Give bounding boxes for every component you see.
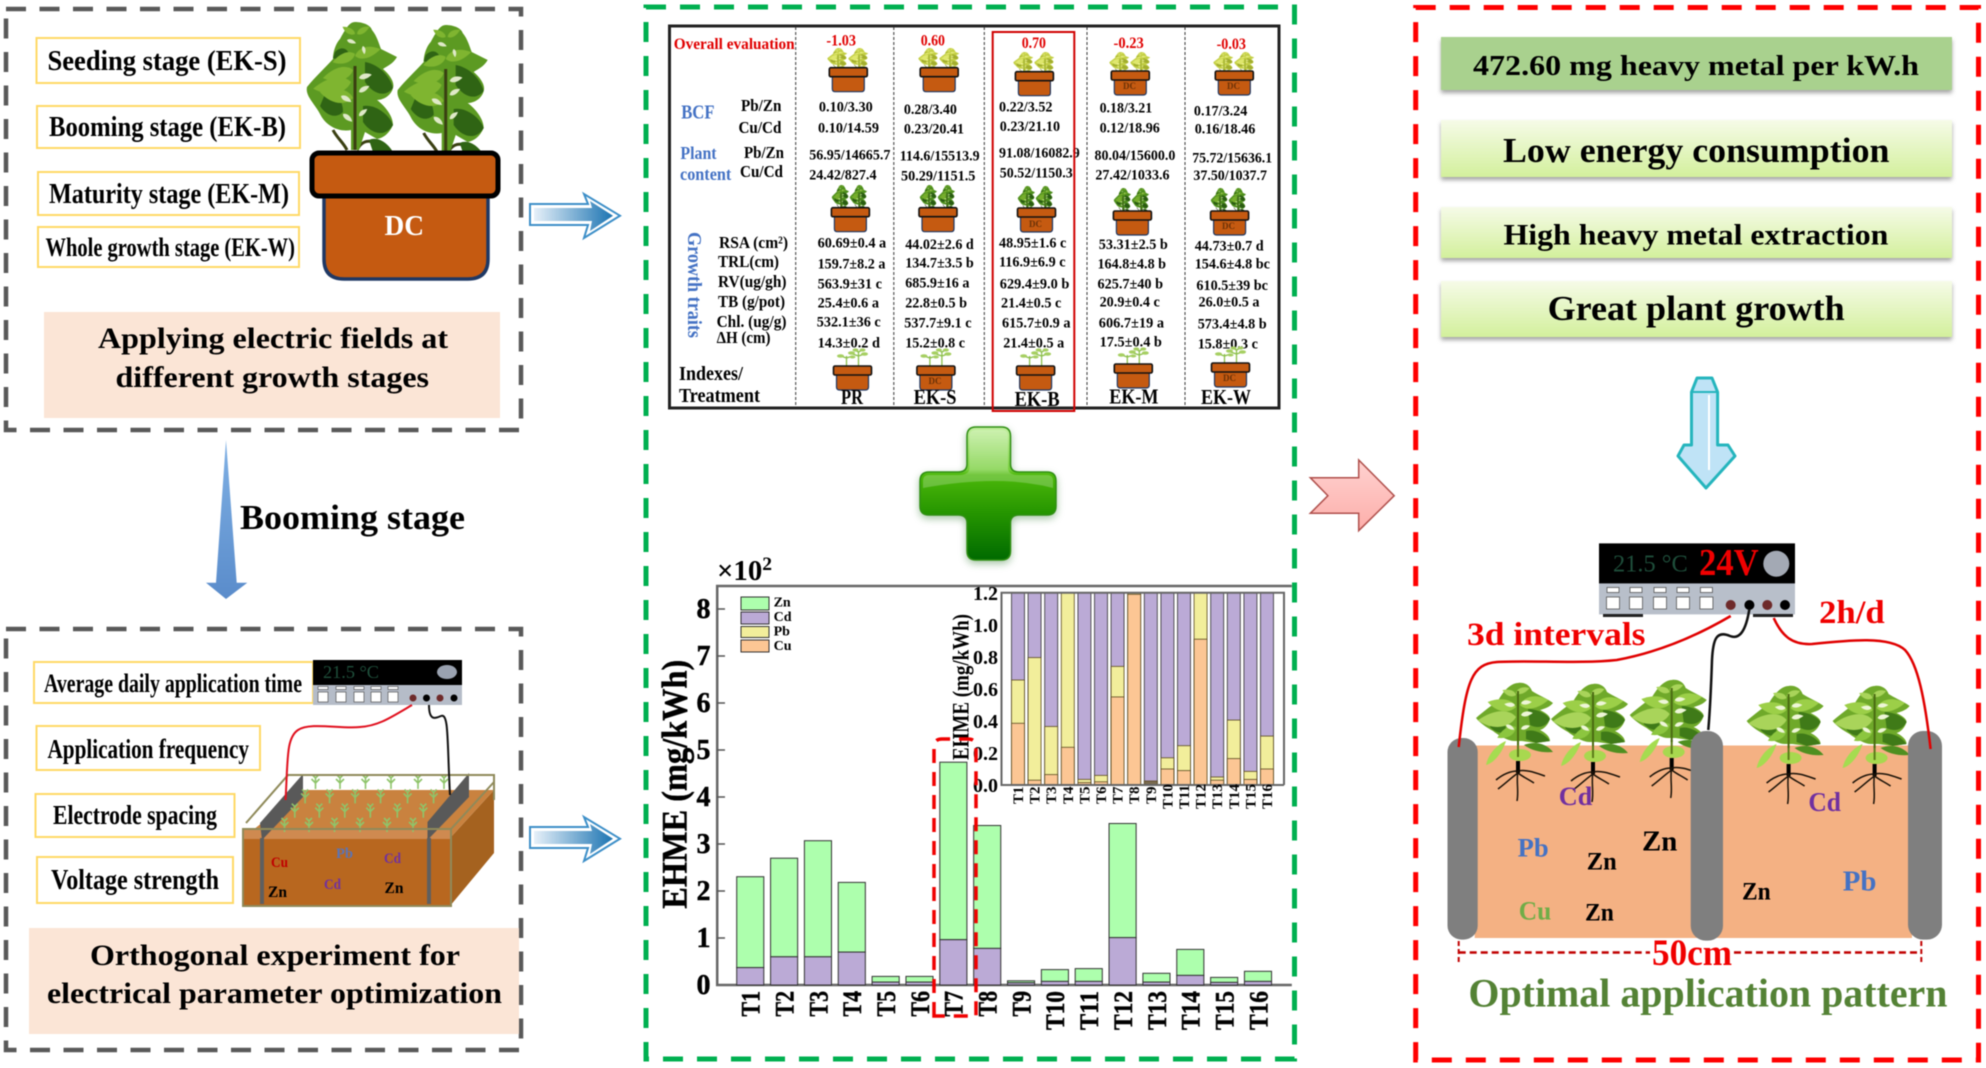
- row labels: BCF and plant content: Pb/Zn: [744, 143, 784, 162]
- values: column EK-M upper: 0.12/18.96: [1100, 121, 1160, 137]
- values: column EK-B growth: 116.9±6.9 c: [999, 255, 1066, 271]
- overall evaluation scores: -0.03: [1217, 36, 1246, 53]
- label: maturity stage: Maturity stage (EK-M): [49, 179, 289, 210]
- highlight: T7 dashed box: [934, 739, 976, 1016]
- label: application frequency: Application frequency: [48, 734, 249, 764]
- label: average daily application time: [34, 662, 313, 703]
- values: column EK-W growth: 15.8±0.3 c: [1198, 336, 1258, 352]
- values: column EK-W growth: 44.73±0.7 d: [1195, 239, 1264, 255]
- axis labels: treatments: Treatment: [679, 386, 760, 407]
- arrow: cyan down: [1678, 378, 1735, 488]
- overall evaluation scores: 0.60: [921, 33, 945, 50]
- panel: orthogonal experiment: [6, 629, 521, 1050]
- x axis labels: T4: [838, 991, 867, 1016]
- icon: power supply 24V: 21.5 °C: [1613, 552, 1688, 578]
- values: column EK-M upper: [1094, 101, 1175, 183]
- inset x labels: T15: [1243, 784, 1259, 809]
- icon: plants in DC pot: DC: [384, 211, 424, 242]
- heavy metal labels: Zn: [1742, 878, 1771, 905]
- values: column EK-S upper: [900, 102, 980, 184]
- y axis ticks: 1: [696, 923, 710, 954]
- row labels: BCF and plant content: BCF: [681, 101, 714, 123]
- values: column EK-W growth: 154.6±4.8 bc: [1195, 256, 1271, 272]
- inset x labels: T1: [1011, 786, 1027, 804]
- label: whole growth stage: [38, 227, 299, 267]
- label: application frequency: [36, 726, 260, 770]
- axis labels: treatments: PR: [841, 385, 864, 409]
- x axis labels: T1: [736, 991, 766, 1016]
- dimension: 50cm: [1459, 933, 1921, 974]
- values: column EK-W upper: 75.72/15636.1: [1192, 151, 1272, 167]
- values: column PR upper: 0.10/3.30: [819, 100, 873, 116]
- icon: mature pot PR: [827, 48, 868, 92]
- overall evaluation scores: [826, 33, 1246, 53]
- icon: power supply 24V: 24V: [1699, 542, 1759, 584]
- heavy metal labels: [1518, 782, 1876, 926]
- icon: seedling pot EK-W: DC: [1223, 373, 1236, 383]
- label: maturity stage: [38, 172, 299, 215]
- text: booming stage: Booming stage: [240, 498, 465, 537]
- values: column PR growth: 14.3±0.2 d: [818, 335, 880, 351]
- legend: Cu: [774, 639, 792, 654]
- multiplier: 2: [762, 554, 772, 575]
- values: column EK-S growth: [904, 237, 974, 351]
- wires: red and black leads: [286, 705, 450, 800]
- diagram: optimal application pattern: [1448, 542, 1948, 1016]
- legend: Cd: [774, 610, 792, 625]
- values: column EK-W upper: 0.16/18.46: [1195, 121, 1255, 137]
- x axis labels: T8: [974, 991, 1002, 1016]
- icon: mature pot EK-S: [918, 48, 959, 92]
- icon: soil box with electrodes: Pb: [336, 846, 353, 862]
- values: column EK-B upper: 50.52/1150.3: [1000, 166, 1073, 182]
- y axis ticks: 2: [696, 876, 710, 907]
- label: whole growth stage: Whole growth stage (EK-W): [46, 233, 295, 262]
- soil block: [1475, 746, 1912, 938]
- values: column EK-M upper: 27.42/1033.6: [1095, 167, 1170, 183]
- inset x labels: T12: [1194, 784, 1210, 809]
- icon: mature pot EK-M: DC: [1123, 81, 1136, 91]
- panel: growth stages: [6, 9, 521, 430]
- values: column PR upper: 24.42/827.4: [809, 167, 876, 183]
- caption: applying electric fields: different growth stages: [116, 361, 429, 394]
- inset x labels: T8: [1127, 786, 1143, 804]
- row labels: growth indexes: TRL(cm): [718, 252, 779, 271]
- values: column EK-W upper: 0.17/3.24: [1194, 103, 1247, 119]
- values: column EK-B upper: 0.23/21.10: [1000, 119, 1060, 135]
- icon: mature pot EK-M: [1109, 52, 1150, 95]
- heavy metal labels: Zn: [1587, 849, 1617, 876]
- row labels: growth indexes: [717, 233, 788, 347]
- row label: growth traits: Growth traits: [683, 232, 705, 338]
- label: 3d intervals: 3d intervals: [1467, 617, 1646, 653]
- inset y ticks: 1.2: [973, 583, 998, 605]
- icon: seedling pot EK-M: [1114, 347, 1152, 388]
- bars: Zn and Cd: [737, 762, 1272, 985]
- inset y title: EHME (mg/kWh): [948, 614, 974, 760]
- icon: booming pot EK-B: [1018, 186, 1056, 232]
- inset y ticks: 0.4: [973, 711, 998, 733]
- label: electrode spacing: [36, 794, 234, 837]
- values: column EK-M growth: 625.7±40 b: [1098, 276, 1163, 292]
- values: column EK-M upper: 0.18/3.21: [1100, 101, 1152, 117]
- icon: green plus: [920, 427, 1056, 560]
- result: energy efficiency: 472.60 mg heavy metal per kW.h: [1473, 50, 1919, 82]
- y axis ticks: 5: [696, 735, 710, 766]
- inset x labels: T16: [1260, 783, 1276, 809]
- arrow: pink right: [1310, 460, 1394, 531]
- panel: evaluation and chart: [646, 7, 1294, 1059]
- heavy metal labels: Cd: [1559, 782, 1593, 811]
- row label: overall evaluation: Overall evaluation: [674, 36, 795, 53]
- wires: [1459, 609, 1931, 749]
- inset y ticks: [973, 583, 998, 797]
- label: average daily application time: Average daily application time: [44, 669, 302, 698]
- values: column EK-M growth: 164.8±4.8 b: [1098, 256, 1166, 272]
- x axis labels: T5: [872, 991, 901, 1016]
- row labels: growth indexes: RV(ug/gh): [718, 272, 786, 291]
- row labels: BCF and plant content: [680, 96, 784, 184]
- row labels: BCF and plant content: Cu/Cd: [740, 162, 783, 181]
- icon: booming pot EK-M: [1113, 188, 1151, 235]
- values: column EK-W growth: 26.0±0.5 a: [1198, 295, 1260, 311]
- caption: orthogonal experiment: electrical parameter optimization: [47, 977, 502, 1010]
- icon: seedling pot EK-S: [917, 348, 955, 390]
- x axis labels: T14: [1177, 991, 1206, 1030]
- icon: soil box with electrodes: [243, 773, 494, 906]
- multiplier: ×10: [717, 556, 761, 587]
- inset x labels: T2: [1028, 786, 1044, 804]
- values: column EK-S growth: 134.7±3.5 b: [905, 255, 974, 271]
- values: column EK-B growth: 629.4±9.0 b: [1000, 276, 1069, 292]
- result: great plant growth: Great plant growth: [1548, 289, 1845, 328]
- inset bars: [1012, 593, 1274, 785]
- heavy metal labels: Cd: [1808, 787, 1841, 817]
- panel: optimal outcome: [1416, 8, 1978, 1060]
- label: electrode spacing: Electrode spacing: [53, 800, 217, 830]
- row labels: growth indexes: ΔH (cm): [717, 328, 770, 347]
- overall evaluation scores: -1.03: [826, 33, 856, 50]
- inset y ticks: 0.6: [973, 679, 998, 701]
- icon: soil box with electrodes: Zn: [268, 884, 287, 901]
- axis labels: treatments: EK-B: [1015, 387, 1060, 411]
- result: great plant growth: [1441, 281, 1952, 337]
- x axis labels: T16: [1244, 991, 1273, 1030]
- values: column EK-M upper: 80.04/15600.0: [1094, 148, 1175, 164]
- values: column EK-S growth: 537.7±9.1 c: [904, 315, 972, 331]
- x axis labels: T9: [1007, 991, 1036, 1016]
- plot frame: [717, 586, 1292, 985]
- heavy metal labels: Pb: [1518, 834, 1549, 863]
- icon: power supply: 21.5 °C: [323, 662, 379, 682]
- values: column EK-S upper: 0.28/3.40: [904, 102, 957, 118]
- icon: seedling pot EK-S: DC: [928, 376, 942, 386]
- inset frame: [1002, 593, 1284, 785]
- axis labels: treatments: EK-S: [914, 385, 956, 409]
- values: column EK-B growth: 21.4±0.5 a: [1003, 335, 1065, 351]
- row labels: growth indexes: RSA (cm²): [719, 233, 788, 252]
- caption: orthogonal experiment: Orthogonal experiment for: [90, 939, 460, 972]
- icon: plants in DC pot: [307, 22, 498, 279]
- icon: soil box with electrodes: Cu: [271, 855, 288, 871]
- icon: soil box with electrodes: Zn: [384, 880, 404, 897]
- electrode: middle: [1691, 731, 1723, 941]
- caption: optimal application pattern: Optimal application pattern: [1468, 971, 1948, 1016]
- icon: power supply 24V: [1599, 542, 1795, 617]
- result: high heavy metal extraction: [1441, 207, 1952, 258]
- inset y ticks: 0.2: [973, 743, 998, 765]
- values: column EK-S upper: 50.29/1151.5: [901, 168, 975, 184]
- x axis labels: T3: [804, 991, 833, 1016]
- values: column EK-M growth: 17.5±0.4 b: [1100, 335, 1162, 351]
- values: column EK-M growth: 20.9±0.4 c: [1100, 295, 1160, 311]
- y axis ticks: 4: [696, 782, 710, 813]
- y axis ticks: 0: [696, 970, 710, 1001]
- legend: [741, 596, 792, 654]
- row labels: growth indexes: Chl. (ug/g): [717, 312, 786, 331]
- values: column PR growth: 532.1±36 c: [817, 315, 881, 331]
- values: column EK-M growth: 53.31±2.5 b: [1099, 237, 1168, 253]
- inset x labels: T9: [1144, 786, 1160, 804]
- caption: applying electric fields: [44, 312, 500, 418]
- values: column PR growth: 25.4±0.6 a: [818, 295, 880, 311]
- inset x labels: T7: [1111, 786, 1127, 804]
- values: column EK-B upper: 0.22/3.52: [999, 99, 1052, 115]
- values: column PR growth: 563.9±31 c: [818, 276, 883, 292]
- caption: applying electric fields: Applying electric fields at: [98, 322, 448, 355]
- values: column PR upper: 0.10/14.59: [818, 121, 879, 137]
- electrode: right: [1908, 731, 1942, 940]
- inset chart: Pb and Cu: [948, 583, 1284, 809]
- values: column EK-W growth: 573.4±4.8 b: [1198, 316, 1267, 332]
- values: column EK-B growth: 615.7±0.9 a: [1002, 316, 1071, 332]
- values: column PR upper: 56.95/14665.7: [809, 147, 890, 163]
- row labels: BCF and plant content: content: [680, 164, 731, 184]
- values: column EK-B growth: [999, 235, 1071, 351]
- values: column EK-W upper: [1192, 103, 1272, 184]
- y axis ticks: 3: [696, 829, 710, 860]
- icon: mature pot EK-W: DC: [1227, 81, 1240, 91]
- icon: booming pot EK-W: DC: [1222, 221, 1235, 231]
- icon: booming pot PR: [831, 185, 869, 232]
- heavy metal labels: Cu: [1519, 896, 1551, 925]
- x axis labels: T6: [906, 991, 935, 1016]
- values: column EK-M growth: [1098, 237, 1168, 351]
- x axis labels: T2: [770, 991, 800, 1016]
- label: 2h/d: 2h/d: [1819, 595, 1885, 631]
- values: column EK-B upper: 91.08/16082.9: [999, 146, 1080, 162]
- overall evaluation scores: -0.23: [1114, 35, 1144, 52]
- x axis labels: T7: [940, 991, 969, 1016]
- inset x labels: T3: [1044, 786, 1060, 804]
- dimension: 50cm: 50cm: [1652, 933, 1732, 974]
- row labels: growth indexes: TB (g/pot): [718, 292, 785, 311]
- values: column EK-S upper: 114.6/15513.9: [900, 149, 980, 165]
- y axis ticks: 8: [696, 594, 710, 625]
- heavy metal labels: Zn: [1585, 899, 1614, 926]
- values: column EK-W growth: [1195, 239, 1271, 352]
- values: column EK-S growth: 44.02±2.6 d: [905, 237, 974, 253]
- overall evaluation scores: 0.70: [1022, 35, 1046, 52]
- inset x labels: T14: [1227, 783, 1243, 809]
- inset x labels: T4: [1061, 786, 1077, 804]
- label: voltage strength: [37, 857, 233, 903]
- x axis labels: T11: [1075, 991, 1104, 1030]
- x axis labels: T12: [1109, 991, 1138, 1030]
- x axis labels: [736, 991, 1273, 1030]
- label: booming stage: Booming stage (EK-B): [49, 112, 286, 143]
- heavy metal labels: Zn: [1642, 825, 1677, 857]
- x axis labels: T10: [1041, 991, 1070, 1030]
- icon: mature pot EK-W: [1213, 52, 1254, 95]
- values: column EK-S growth: 685.9±16 a: [905, 275, 970, 291]
- values: column EK-W upper: 37.50/1037.7: [1193, 168, 1267, 184]
- icon: booming pot EK-W: [1211, 188, 1249, 235]
- values: column EK-B growth: 21.4±0.5 c: [1001, 295, 1062, 311]
- icon: soil box with electrodes: Cd: [324, 877, 342, 893]
- values: column EK-S upper: 0.23/20.41: [904, 122, 964, 138]
- axis labels: treatments: EK-W: [1201, 385, 1251, 409]
- row labels: BCF and plant content: Cu/Cd: [738, 118, 781, 137]
- icon: booming pot EK-S: [919, 185, 957, 232]
- label: voltage strength: Voltage strength: [51, 864, 219, 896]
- values: column PR growth: 60.69±0.4 a: [818, 235, 887, 251]
- caption: orthogonal experiment: [29, 928, 519, 1034]
- electrode: left: [1448, 738, 1478, 940]
- inset y ticks: 0.0: [973, 775, 998, 797]
- values: column EK-B growth: 48.95±1.6 c: [999, 235, 1067, 251]
- y axis ticks: 7: [696, 641, 710, 672]
- arrow: down to orthogonal experiment: [206, 440, 247, 599]
- result: high heavy metal extraction: High heavy metal extraction: [1504, 218, 1889, 251]
- y axis ticks: [696, 594, 725, 1001]
- plants with roots: [1476, 680, 1910, 804]
- label: booming stage: [37, 106, 300, 148]
- icon: seedling pot EK-B: [1017, 348, 1055, 390]
- chart: EHME stacked bars: [654, 554, 1292, 1030]
- y axis ticks: 6: [696, 688, 710, 719]
- arrow: blue right, upper: [530, 194, 620, 238]
- icon: booming pot EK-B: DC: [1029, 219, 1042, 229]
- heavy metal labels: Pb: [1843, 866, 1876, 898]
- inset x labels: T5: [1077, 786, 1093, 804]
- axis labels: treatments: EK-M: [1109, 384, 1159, 408]
- table: treatment comparison: [670, 26, 1279, 411]
- values: column EK-S growth: 22.8±0.5 b: [905, 295, 967, 311]
- values: column EK-W growth: 610.5±39 bc: [1196, 278, 1269, 294]
- legend: Pb: [774, 624, 790, 639]
- row labels: BCF and plant content: Plant: [680, 143, 717, 163]
- icon: mature pot EK-B: [1013, 52, 1054, 96]
- inset x labels: T6: [1094, 786, 1110, 804]
- inset y ticks: 0.8: [973, 647, 998, 669]
- icon: seedling pot PR: [834, 348, 872, 390]
- label: seeding stage: [36, 38, 300, 83]
- result: energy efficiency: [1441, 37, 1952, 90]
- y axis title: EHME (mg/kWh): [654, 660, 694, 909]
- x axis labels: T13: [1143, 991, 1172, 1030]
- icon: power supply: [313, 660, 462, 705]
- icon: seedling pot EK-W: [1212, 346, 1250, 387]
- values: column EK-M growth: 606.7±19 a: [1099, 316, 1165, 332]
- inset x labels: T11: [1177, 785, 1193, 809]
- row labels: BCF and plant content: Pb/Zn: [741, 96, 781, 115]
- values: column PR growth: [817, 235, 887, 351]
- icon: soil box with electrodes: Cd: [384, 851, 402, 867]
- values: column EK-S growth: 15.2±0.8 c: [905, 335, 966, 351]
- result: low energy consumption: [1441, 120, 1952, 177]
- inset x labels: T13: [1210, 784, 1226, 809]
- inset x labels: [1011, 783, 1276, 809]
- axis labels: treatments: Indexes/: [679, 364, 744, 385]
- legend: Zn: [774, 596, 791, 611]
- result: low energy consumption: Low energy consumption: [1503, 131, 1890, 170]
- label: seeding stage: Seeding stage (EK-S): [48, 46, 286, 77]
- x axis labels: T15: [1210, 991, 1240, 1030]
- highlight: EK-B column: [993, 32, 1074, 411]
- inset x labels: T10: [1160, 784, 1176, 809]
- values: column PR growth: 159.7±8.2 a: [818, 256, 886, 272]
- axis labels: treatments: [679, 364, 1251, 411]
- values: column EK-B upper: [999, 99, 1080, 182]
- inset y ticks: 1.0: [973, 615, 998, 637]
- values: column PR upper: [809, 100, 890, 183]
- arrow: blue right, lower: [530, 817, 620, 861]
